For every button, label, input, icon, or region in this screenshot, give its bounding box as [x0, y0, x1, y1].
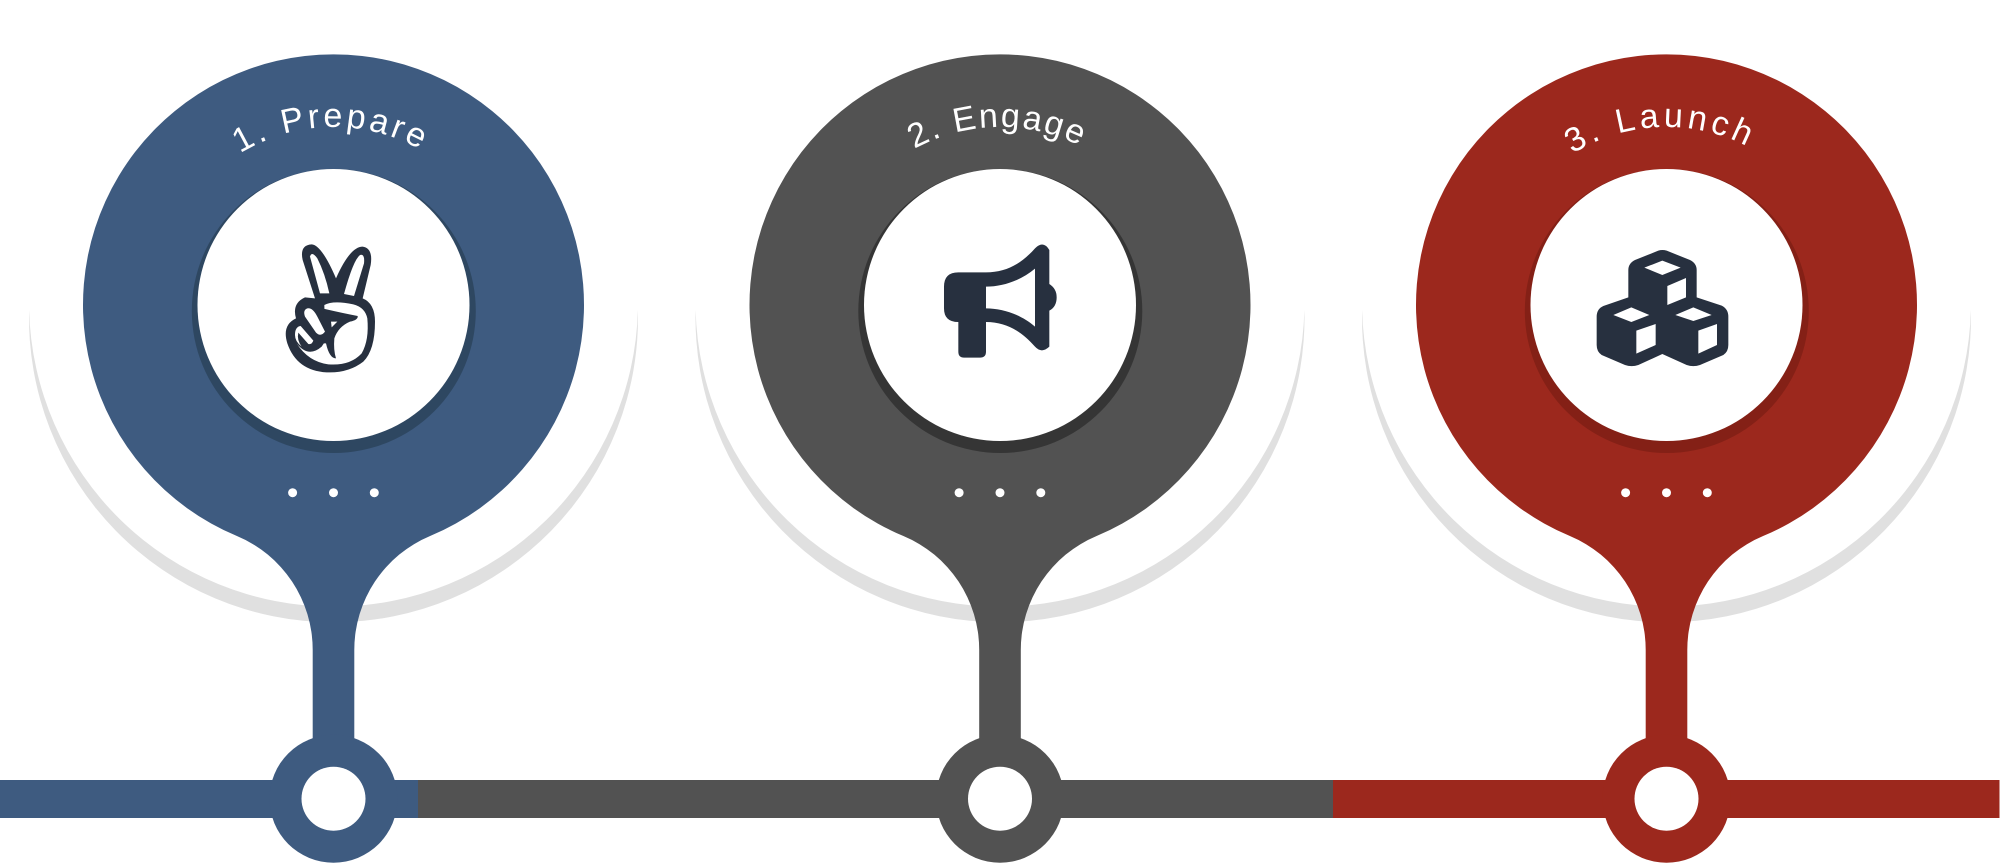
icon disc shadow 2	[858, 169, 1142, 453]
icon disc shadow 3	[1525, 169, 1809, 453]
grey crescent shadow 1	[29, 310, 638, 622]
icon: peace hand	[286, 244, 375, 372]
timeline node 3	[1602, 735, 1730, 863]
grey crescent shadow 3	[1362, 310, 1971, 622]
timeline bar segment 1	[0, 780, 418, 818]
icon disc 1	[198, 169, 470, 441]
pin shape 3	[1416, 54, 1917, 760]
icon disc 3	[1530, 169, 1802, 441]
timeline bar segment 3	[1333, 780, 2000, 818]
pagination dots 3	[1621, 488, 1712, 497]
pagination dots 2	[955, 488, 1045, 497]
icon: stacked cubes	[1597, 250, 1728, 366]
heading: 1. Prepare: 1. Prepare	[234, 108, 424, 152]
grey crescent shadow 2	[695, 310, 1305, 622]
panel: step 2 engage	[418, 54, 1333, 863]
pin shape 2	[750, 54, 1250, 760]
panel: step 1 prepare	[0, 54, 638, 863]
timeline bar segment 2	[418, 780, 1333, 818]
timeline node 2	[936, 735, 1064, 863]
icon disc shadow 1	[192, 169, 476, 453]
pin shape 1	[83, 54, 584, 760]
heading: 2. Engage: 2. Engage	[908, 106, 1083, 148]
timeline node 1	[270, 735, 398, 863]
panel: step 3 launch	[1333, 54, 2000, 863]
pagination dots 1	[288, 488, 379, 497]
heading: 3. Launch: 3. Launch	[1564, 108, 1750, 151]
icon: megaphone	[944, 245, 1057, 358]
icon disc 2	[864, 169, 1136, 441]
